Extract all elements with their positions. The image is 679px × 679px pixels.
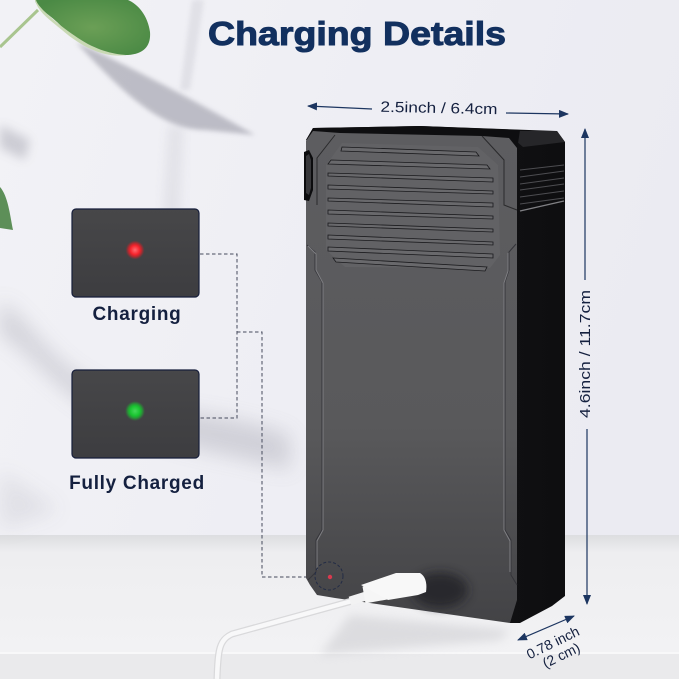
icon: green LED [125, 401, 145, 421]
width dimension [308, 99, 568, 118]
depth label: 0.78 inch [524, 623, 582, 662]
front grooves [307, 244, 517, 585]
device shadow on table [320, 615, 510, 655]
height label: 4.6inch / 11.7cm [577, 290, 594, 418]
width label: 2.5inch / 6.4cm [380, 99, 498, 118]
top panel outline [317, 135, 517, 210]
width arrow right [506, 113, 568, 114]
device top edge [306, 126, 520, 150]
side button [304, 150, 313, 201]
panel: fully charged indicator [72, 370, 199, 458]
label: Fully Charged: Fully Charged [69, 473, 205, 494]
height arrow top [584, 129, 586, 280]
plant leaves [0, 0, 150, 230]
depth dimension [518, 616, 588, 676]
power bank device [304, 126, 565, 655]
device top chamfer [505, 131, 565, 147]
dashed connector lines [200, 254, 310, 577]
device silhouette and side [306, 126, 565, 623]
side ribs [520, 165, 564, 211]
indicator LED highlight [315, 562, 343, 590]
usb cable [217, 573, 426, 679]
icon: red LED [126, 240, 144, 260]
vent slots [328, 147, 493, 271]
height arrow bottom [586, 429, 588, 604]
device front [306, 131, 517, 623]
port shadow [412, 572, 468, 608]
panel: charging indicator [72, 209, 199, 297]
label: Charging: Charging [92, 304, 182, 325]
depth arrow [518, 616, 574, 640]
title: Charging Details [208, 15, 506, 52]
width arrow left [308, 106, 372, 109]
depth label: (2 cm) [540, 639, 583, 671]
